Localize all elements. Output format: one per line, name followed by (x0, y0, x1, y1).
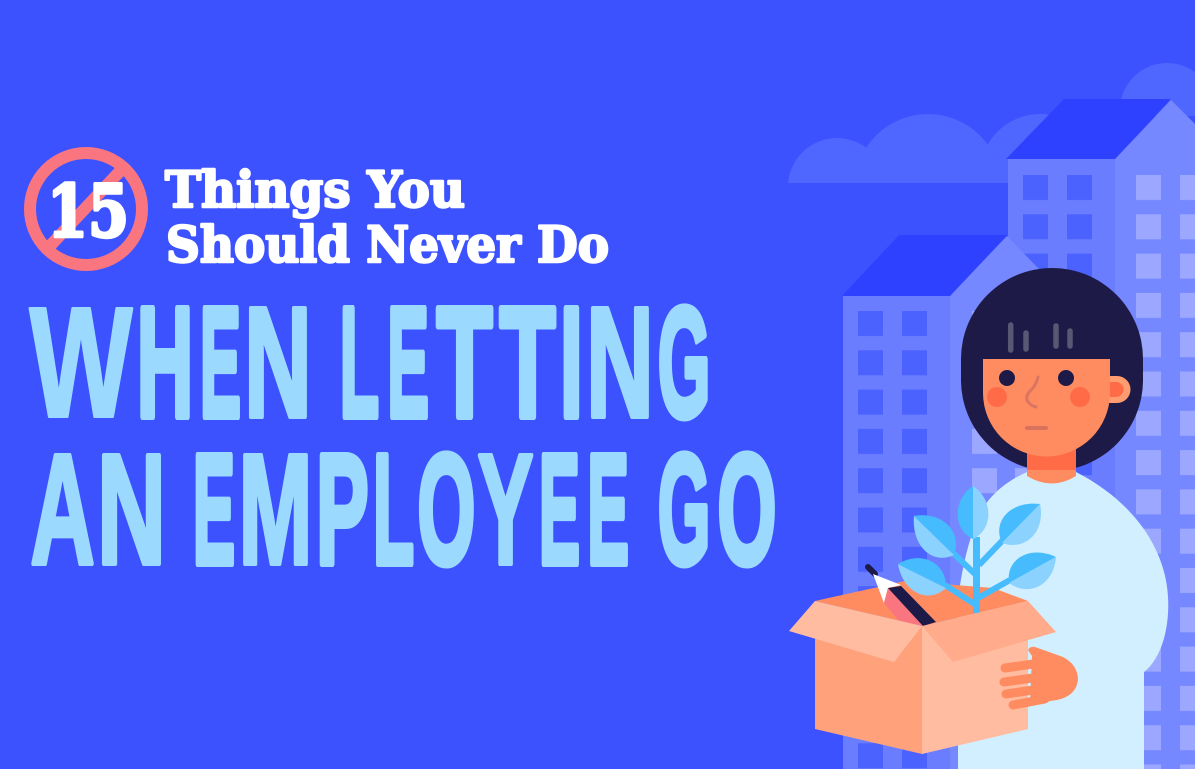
leaf: top (958, 486, 988, 539)
title line 1: E (387, 276, 429, 450)
title line 1: E (200, 276, 241, 450)
main title: G (658, 276, 710, 450)
hair (961, 268, 1143, 471)
body sweater (958, 472, 1168, 769)
title line 1: T (437, 276, 492, 450)
leaf: upper right (990, 492, 1052, 555)
number 15: 15 (47, 168, 129, 254)
title line 1: W (30, 276, 133, 450)
icon: pencil (868, 567, 936, 626)
title line 2: A (30, 422, 95, 598)
leaf: lower left (890, 549, 954, 603)
title line 1: L (340, 276, 379, 450)
prohibition badge with number 15 (30, 153, 142, 265)
hand (1004, 647, 1078, 705)
icon: prohibition circle (30, 153, 142, 265)
nose (1027, 377, 1038, 407)
box left face (815, 626, 922, 754)
box left flap (789, 601, 922, 662)
face (983, 359, 1110, 456)
front building (842, 235, 1065, 769)
heading line 2: Should Never Do (166, 215, 609, 274)
title line 2: Y (478, 422, 533, 598)
box interior (815, 581, 1028, 626)
title line 2: G (658, 422, 710, 598)
title line 1: H (137, 276, 193, 450)
leaf: lower right (1001, 542, 1064, 598)
title line 2: E (539, 422, 580, 598)
mouth (1027, 426, 1046, 430)
cloud: left of buildings (788, 114, 1048, 183)
title line 1: I (560, 276, 583, 450)
heading: things you should never do (165, 160, 609, 274)
title line 2: M (239, 422, 312, 598)
title line 2: P (316, 422, 369, 598)
leaf: upper left (902, 504, 966, 567)
cityscape background (788, 63, 1195, 769)
title line 2: L (373, 422, 414, 598)
heading line 1: Things You (165, 160, 465, 219)
title line 2: O (418, 422, 475, 598)
ear (1108, 376, 1130, 403)
box right flap (922, 601, 1056, 662)
neck (1027, 445, 1076, 484)
title line 2: E (587, 422, 629, 598)
cheeks (987, 387, 1090, 407)
box right face (922, 626, 1028, 754)
icon: plant (890, 486, 1064, 613)
title line 1: N (244, 276, 312, 450)
text: O (718, 422, 776, 598)
title line 2: E (193, 422, 235, 598)
title line 2: N (97, 422, 166, 598)
cloud: upper right (1122, 63, 1195, 116)
main title (30, 276, 776, 598)
character: employee holding box (958, 268, 1168, 769)
hair highlights (1011, 325, 1070, 350)
box with plant and pencil (789, 486, 1078, 754)
back building (1006, 99, 1195, 769)
title line 1: T (500, 276, 555, 450)
eyes (999, 370, 1074, 386)
title line 1: N (586, 276, 654, 450)
